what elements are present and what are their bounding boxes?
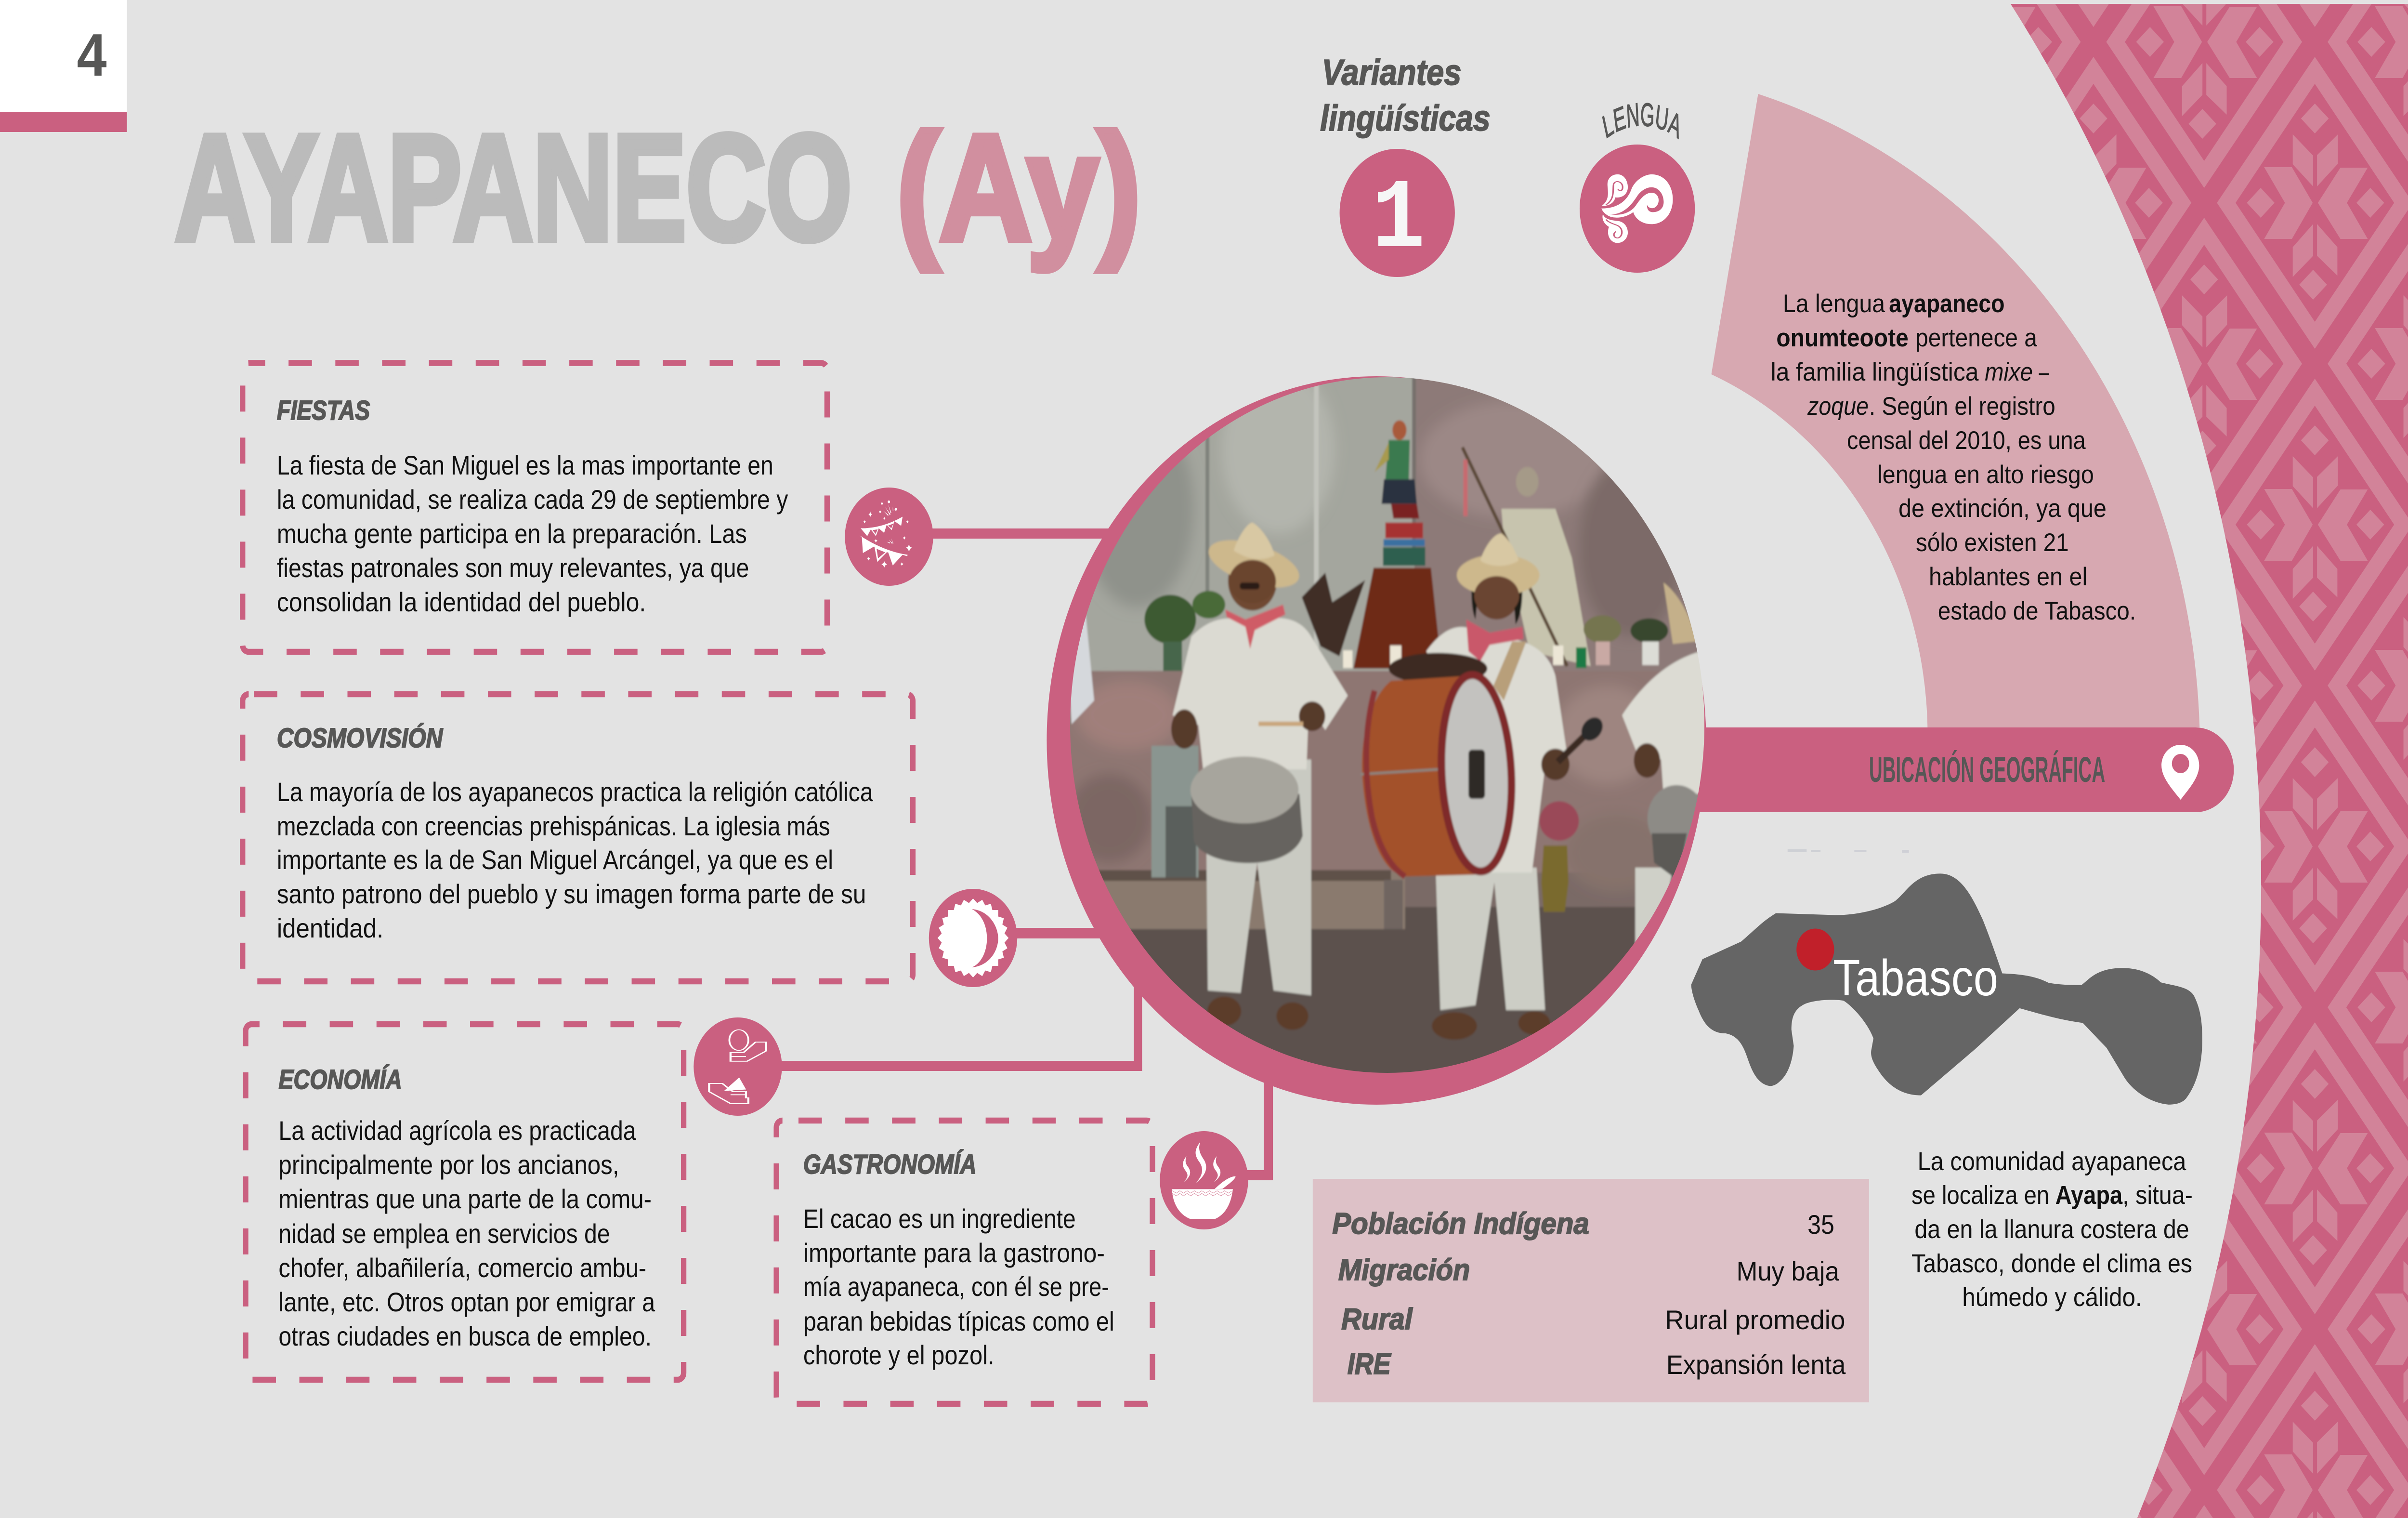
location dot	[1796, 929, 1834, 970]
panel: gastronomía	[776, 1121, 1152, 1404]
row: población indígena	[1332, 1207, 1834, 1241]
photo ring	[1047, 376, 1706, 1105]
lengua text: pertenece a	[1915, 323, 2038, 352]
fiestas text: fiestas patronales son muy relevantes, ya que	[277, 554, 749, 583]
gastronomía text: paran bebidas típicas como el	[803, 1307, 1114, 1337]
economía text: mientras que una parte de la comu-	[278, 1185, 652, 1214]
icon: location pin	[2161, 745, 2199, 800]
heading: gastronomía: GASTRONOMÍA	[803, 1149, 977, 1180]
lengua text: la familia lingüística	[1771, 357, 1979, 386]
lengua text: . Según el registro	[1869, 392, 2055, 421]
heading: fiestas: FIESTAS	[277, 396, 370, 426]
plants	[1144, 595, 1196, 644]
lengua text: de extinción, ya que	[1898, 494, 2107, 523]
community location text: da en la llanura costera de	[1914, 1215, 2189, 1244]
community location text: Ayapa	[2055, 1181, 2123, 1210]
musician 3	[1635, 868, 1673, 946]
icon: gastronomía bowl	[1160, 1131, 1248, 1229]
gastronomía text: chorote y el pozol.	[803, 1341, 995, 1371]
title: AYAPANECO	[175, 103, 852, 271]
data table: indicators	[1313, 1179, 1869, 1402]
musician 1	[1205, 760, 1311, 995]
cosmovisión text: mezclada con creencias prehispánicas. La iglesia más	[277, 812, 830, 842]
lengua text: onumteoote	[1776, 323, 1909, 352]
lengua text: mixe	[1985, 357, 2033, 386]
row: rural: Rural promedio	[1665, 1306, 1845, 1335]
community location text: se localiza en	[1911, 1181, 2049, 1210]
row: IRE: Expansión lenta	[1666, 1350, 1846, 1380]
gastronomía text: El cacao es un ingrediente	[803, 1204, 1076, 1234]
candles	[1343, 650, 1352, 668]
lengua text: sólo existen 21	[1916, 528, 2069, 557]
map artefact smudges	[1788, 849, 1909, 853]
cosmovisión text: La mayoría de los ayapanecos practica la religión católica	[277, 778, 873, 807]
altar pedestal	[1353, 568, 1442, 669]
panel: fiestas	[243, 363, 827, 652]
lengua text: La lengua	[1783, 289, 1885, 318]
lengua text: –	[2039, 357, 2049, 386]
panel: economía	[246, 1024, 684, 1380]
gastronomía text: mía ayapaneca, con él se pre-	[803, 1272, 1109, 1302]
gastronomía text: importante para la gastrono-	[803, 1239, 1105, 1268]
cosmovisión text: importante es la de San Miguel Arcángel, ya que es el	[277, 845, 833, 875]
row: migración: Migración	[1338, 1254, 1470, 1287]
background: textile pattern	[1950, 4, 2408, 1518]
map: Tabasco	[1691, 873, 2202, 1105]
ubicación geográfica bar	[1689, 727, 2234, 812]
heading: cosmovisión: COSMOVISIÓN	[277, 723, 444, 753]
statue of the virgin	[1516, 467, 1539, 497]
row: población indígena: 35	[1807, 1210, 1834, 1240]
economía text: principalmente por los ancianos,	[278, 1150, 619, 1180]
state label: Tabasco	[1833, 950, 1998, 1006]
community location text: húmedo y cálido.	[1962, 1283, 2142, 1312]
economía text: lante, etc. Otros optan por emigrar a	[278, 1288, 655, 1318]
variantes badge: 1	[1340, 149, 1455, 277]
row: IRE	[1348, 1347, 1846, 1381]
lengua text: censal del 2010, es una	[1847, 426, 2086, 455]
economía text: La actividad agrícola es practicada	[278, 1116, 636, 1146]
community location text: La comunidad ayapaneca	[1918, 1147, 2186, 1176]
fiestas text: La fiesta de San Miguel es la mas importante en	[277, 451, 773, 481]
cosmovisión text	[277, 778, 873, 944]
economía text: chofer, albañilería, comercio ambu-	[278, 1254, 646, 1283]
lengua text: zoque	[1807, 392, 1869, 421]
lengua text: lengua en alto riesgo	[1877, 460, 2094, 489]
statue of San Miguel	[1392, 420, 1406, 440]
lengua curved label	[1602, 103, 1679, 140]
fiestas text	[277, 451, 788, 618]
economía text	[278, 1116, 655, 1352]
icon: economía hands	[694, 1017, 782, 1116]
lengua text: estado de Tabasco.	[1938, 596, 2136, 625]
row: migración	[1338, 1254, 1839, 1287]
photo: musicians with drums in the church	[1044, 361, 1720, 1084]
lengua curved label: LENGUA	[1602, 103, 1679, 140]
fiestas text: mucha gente participa en la preparación. Las	[277, 519, 747, 549]
community location text	[1911, 1147, 2193, 1312]
icon: cosmovisión sun and moon	[929, 889, 1017, 987]
page number tab: 4	[77, 22, 107, 88]
heading: economía: ECONOMÍA	[278, 1065, 402, 1095]
variantes badge: 1: 1	[1372, 164, 1425, 276]
icon: lengua speech swirl	[1580, 145, 1695, 273]
row: población indígena: Población Indígena	[1332, 1207, 1589, 1241]
lengua text: ayapaneco	[1889, 289, 2004, 318]
left edge sleeve	[1067, 615, 1094, 724]
variantes lingüísticas heading: Variantes	[1322, 53, 1461, 93]
musician 2	[1436, 868, 1545, 1010]
flowers and vase	[1539, 801, 1579, 841]
page number tab	[0, 0, 127, 132]
cosmovisión text: identidad.	[277, 914, 383, 944]
lengua text	[1771, 289, 2136, 625]
cosmovisión text: santo patrono del pueblo y su imagen forma parte de su	[277, 880, 866, 910]
row: migración: Muy baja	[1737, 1257, 1839, 1287]
gastronomía text	[803, 1204, 1114, 1371]
variantes lingüísticas heading: lingüísticas	[1320, 98, 1491, 139]
lengua text: hablantes en el	[1929, 562, 2087, 591]
fiestas text: la comunidad, se realiza cada 29 de septiembre y	[277, 485, 788, 515]
connector lines to photo	[758, 528, 1273, 1180]
title: (Ay)	[897, 103, 1141, 272]
row: IRE: IRE	[1348, 1347, 1391, 1381]
row: rural	[1341, 1303, 1845, 1336]
economía text: otras ciudades en busca de empleo.	[278, 1322, 652, 1352]
panel: cosmovisión	[243, 694, 913, 981]
community location text: Tabasco, donde el clima es	[1911, 1249, 2192, 1278]
community location text: , situa-	[2122, 1181, 2193, 1210]
row: rural: Rural	[1341, 1303, 1413, 1336]
economía text: nidad se emplea en servicios de	[278, 1219, 610, 1249]
wall and floor	[1086, 377, 1415, 673]
panel: lengua wedge	[1711, 94, 2199, 727]
ubicación geográfica bar: UBICACIÓN GEOGRÁFICA	[1869, 750, 2105, 790]
icon: fiestas bunting	[845, 488, 933, 586]
variantes lingüísticas heading	[1320, 53, 1491, 139]
fiestas text: consolidan la identidad del pueblo.	[277, 588, 646, 618]
